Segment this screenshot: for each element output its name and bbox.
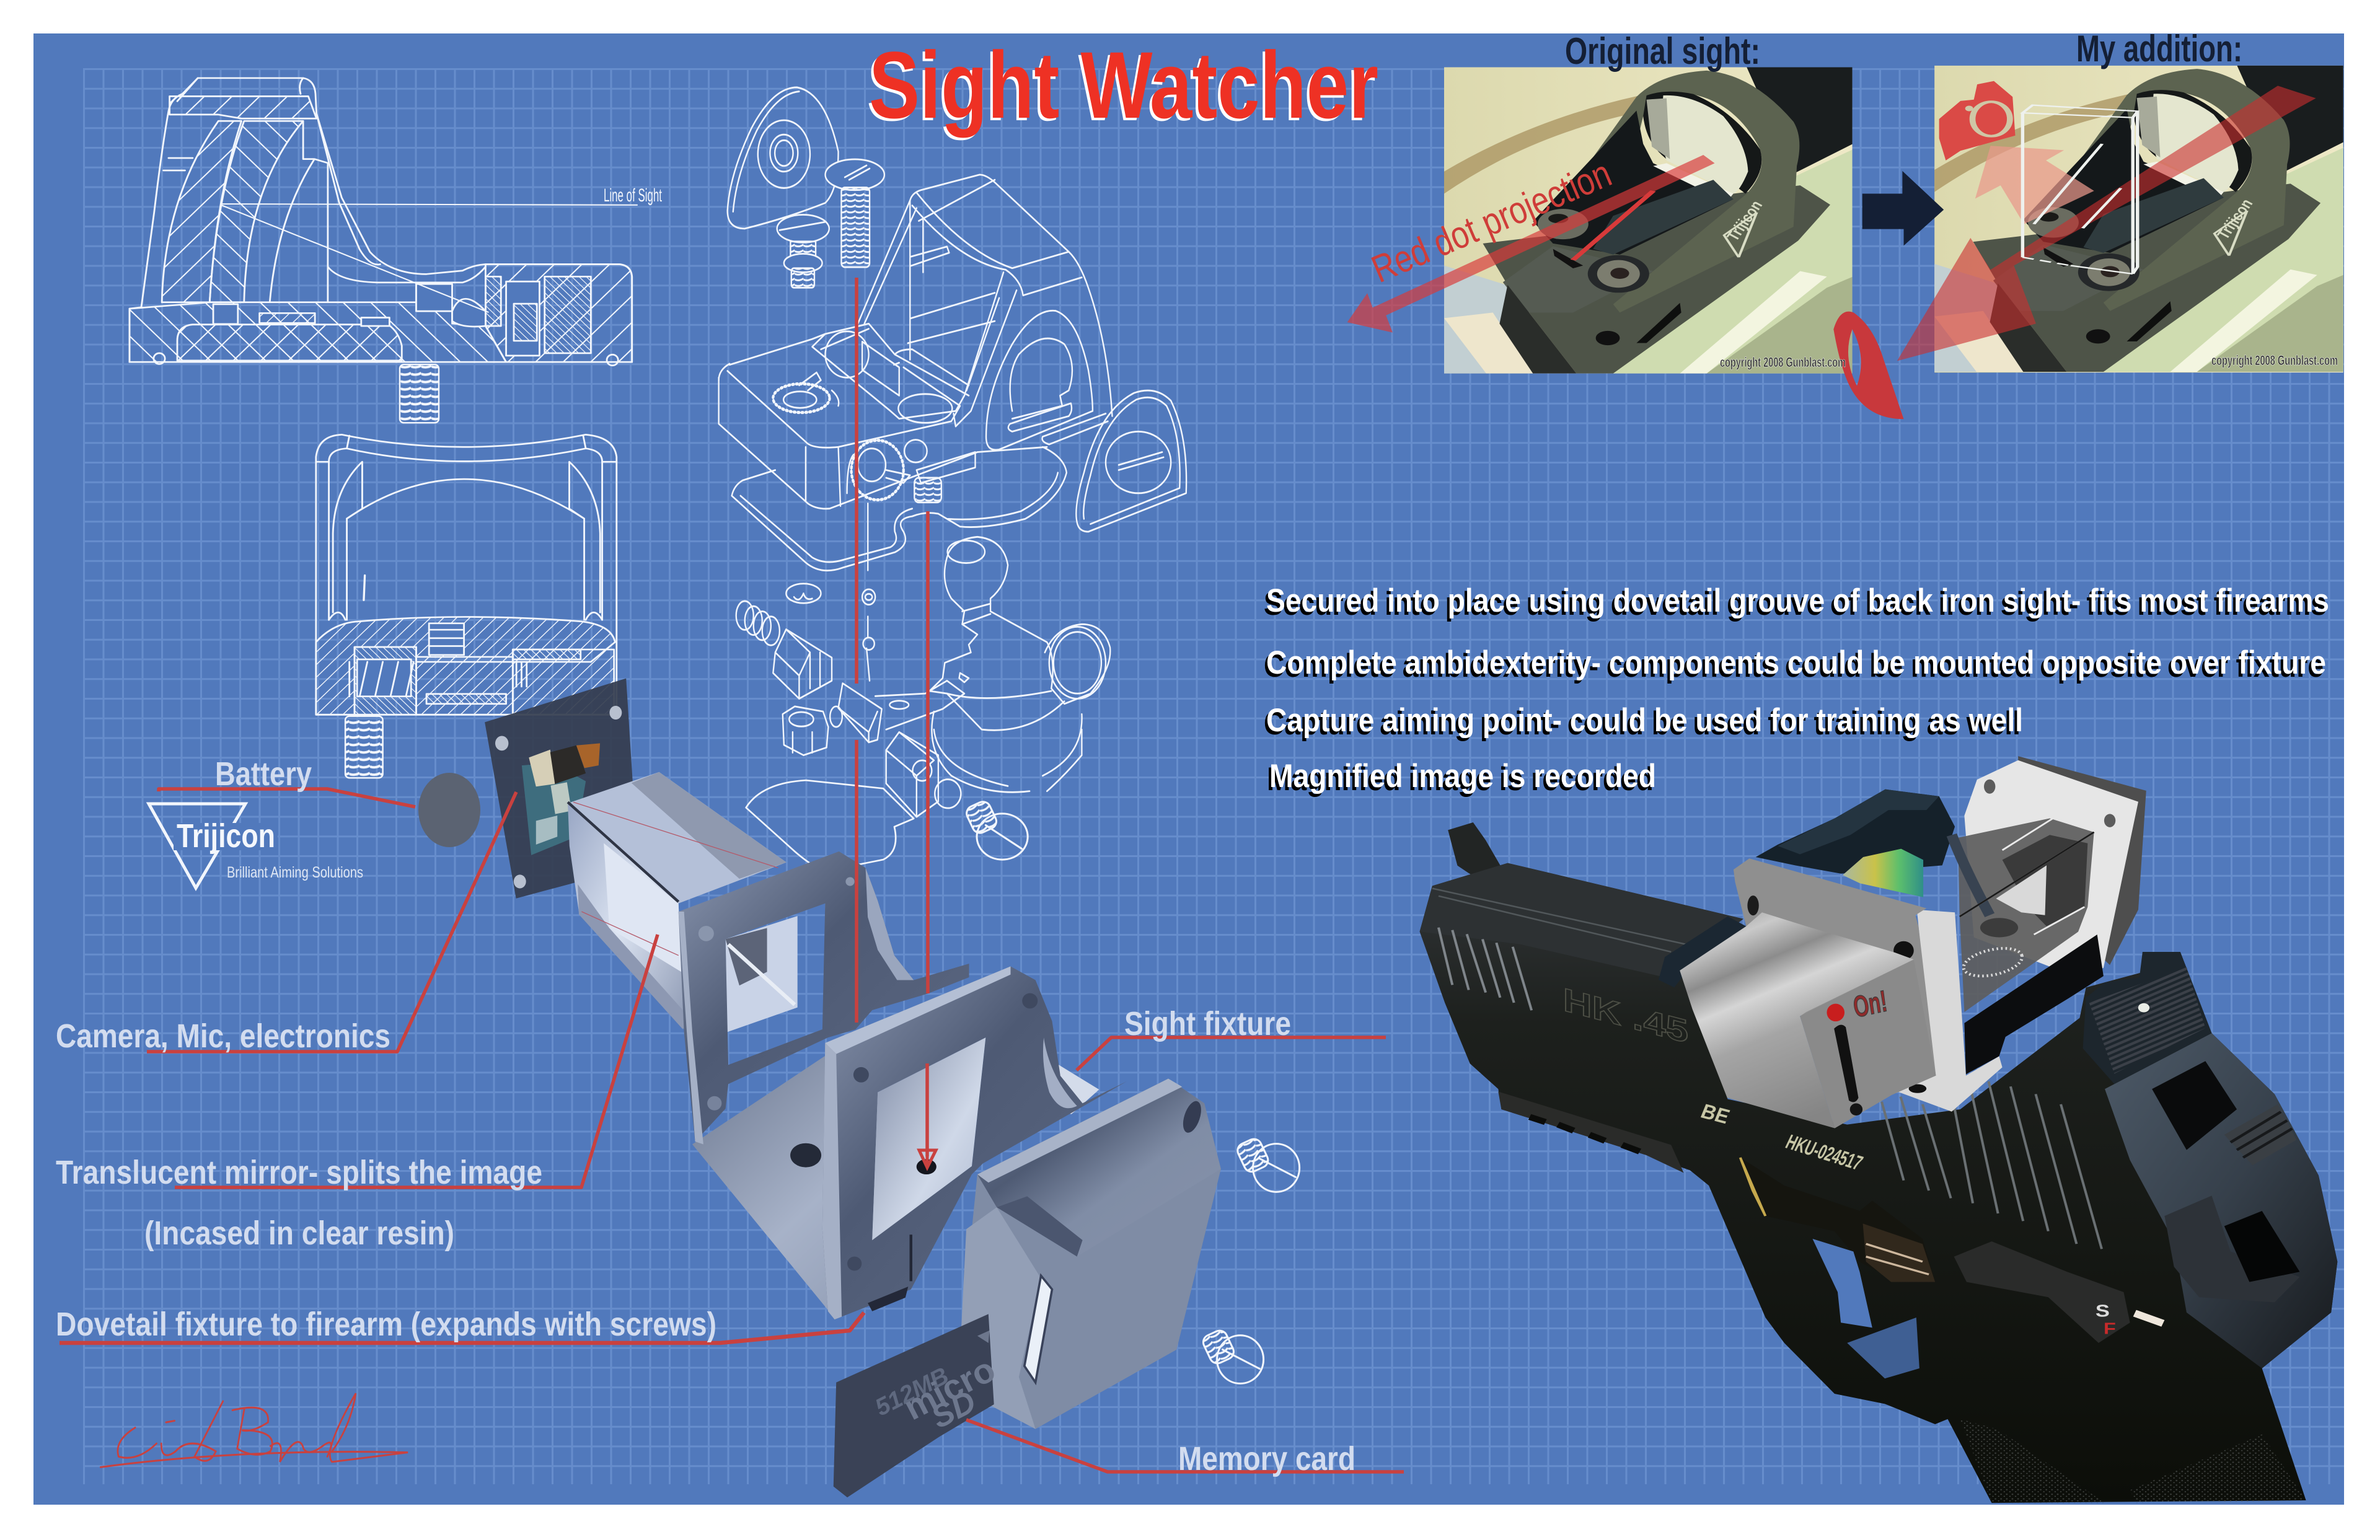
Trijicon logo: Trijicon bbox=[177, 817, 275, 855]
lower block with screw bbox=[886, 732, 961, 817]
slide release lever bbox=[1740, 1158, 1935, 1282]
signature bbox=[100, 1393, 408, 1467]
Trijicon logo: Brilliant Aiming Solutions bbox=[227, 864, 363, 881]
mounting screw thread bbox=[400, 364, 439, 423]
micro SD memory card: 512MB bbox=[871, 1363, 953, 1421]
trigger bbox=[1863, 1223, 1935, 1282]
silver cap front flange bbox=[1734, 858, 1936, 1128]
side cross-section line drawing with line of sight bbox=[130, 78, 637, 423]
feature: aiming point: Capture aiming point- could be used for training as well bbox=[1266, 702, 2023, 739]
label: sight fixture: Sight fixture bbox=[1124, 1005, 1291, 1042]
icon: red eccentric cap bbox=[1833, 312, 1904, 419]
pivot knob and spring plate bbox=[930, 537, 1110, 792]
label: dovetail fixture: Dovetail fixture to firearm (expands with screws) bbox=[56, 1306, 716, 1343]
label: battery: Battery bbox=[215, 755, 312, 793]
pistol bbox=[1420, 822, 2337, 1503]
label: camera, mic, electronics: Camera, Mic, electronics bbox=[56, 1018, 390, 1055]
small pins bbox=[786, 503, 875, 680]
barrel shroud bbox=[1659, 917, 1747, 987]
safety marking S: S bbox=[2096, 1301, 2110, 1321]
photo credit left: copyright 2008 Gunblast.com bbox=[1720, 354, 1846, 370]
translucent mirror resin block bbox=[568, 772, 787, 1029]
card slot bbox=[1834, 1025, 1858, 1102]
rear serrations bbox=[1882, 1081, 2102, 1249]
large countersunk screw bbox=[825, 159, 884, 267]
battery disc bbox=[418, 773, 480, 847]
hammer bbox=[2152, 1061, 2237, 1150]
slide top ledge bbox=[1420, 863, 1743, 977]
red leader lines bbox=[60, 278, 1404, 1472]
white front plate bbox=[1892, 910, 2003, 1112]
memory slot cover bbox=[961, 1078, 1221, 1429]
lower rail bbox=[1498, 1091, 1684, 1173]
Trijicon logo bbox=[149, 804, 363, 888]
feature: magnified image: Magnified image is recorded bbox=[1269, 758, 1656, 794]
lower black mount bbox=[1964, 935, 2104, 1074]
lower gasket, screw drawings around assembly bbox=[746, 780, 1300, 1384]
loose screw upper bbox=[964, 799, 1028, 860]
arrow: reflected image to camera bbox=[1975, 146, 2094, 224]
HK logo marking: HK .45 bbox=[1563, 980, 1688, 1050]
clear prism bbox=[1958, 819, 2094, 1012]
sight fixture front plate bbox=[822, 966, 1127, 1319]
lower mounting screw thread bbox=[345, 716, 383, 778]
3D exploded assembly bbox=[568, 772, 1221, 1497]
photo: my addition bbox=[1934, 66, 2343, 372]
small screw and washer bbox=[777, 215, 829, 288]
sight hood bbox=[1756, 790, 1955, 874]
camera and electronics board bbox=[485, 679, 638, 899]
spring bbox=[736, 601, 780, 645]
arrow: original to addition bbox=[1862, 171, 1944, 245]
trigger guard opening bbox=[1812, 1239, 1872, 1327]
battery contact bracket bbox=[839, 680, 964, 742]
back bracket plate bbox=[679, 851, 969, 1142]
front cross-section line drawing bbox=[316, 434, 617, 778]
pistol body bbox=[1420, 863, 2337, 1503]
floor of sight fixture bbox=[1036, 1054, 1099, 1114]
slider block bbox=[773, 630, 832, 698]
safety marking F: F bbox=[2104, 1319, 2116, 1337]
rear sight bbox=[2083, 952, 2211, 1084]
right eccentric cap bbox=[1076, 390, 1186, 532]
status LED bbox=[1827, 1004, 1844, 1021]
silver cap body bbox=[1680, 912, 1914, 1128]
loose screw right bbox=[1235, 1137, 1300, 1192]
label: my addition: My addition: bbox=[2076, 28, 2242, 69]
micro SD memory card: micro bbox=[898, 1350, 1002, 1428]
gasket outline bbox=[732, 447, 1067, 571]
label: On!: On! bbox=[1849, 985, 1891, 1024]
grip stippling bbox=[1960, 1419, 2306, 1503]
base dials bbox=[773, 372, 976, 503]
photo: original sight bbox=[1444, 67, 1853, 374]
arrow: light path through addition bbox=[1897, 86, 2316, 361]
label: translucent mirror: Translucent mirror- splits the image bbox=[56, 1154, 542, 1191]
label: red dot projection: Red dot projection bbox=[1366, 152, 1618, 291]
label: memory card: Memory card bbox=[1178, 1440, 1355, 1477]
title: Sight Watcher bbox=[869, 32, 1378, 138]
sight hood and base bbox=[719, 175, 1112, 509]
label: line of sight: Line of Sight bbox=[604, 185, 662, 206]
marking BE: BE bbox=[1698, 1099, 1733, 1128]
photo comparison panel bbox=[1347, 66, 2343, 419]
marking serial: HKU-024517 bbox=[1783, 1130, 1866, 1174]
prism seen through window bbox=[726, 916, 798, 1032]
left eccentric cap bbox=[728, 87, 839, 229]
feature list bbox=[1266, 583, 2329, 794]
exploded isometric sight line drawing bbox=[719, 87, 1186, 817]
rear white plate bbox=[1964, 760, 2138, 979]
rear plate dark edge bbox=[2018, 756, 2146, 965]
front sight bbox=[1448, 822, 1508, 878]
component labels bbox=[56, 755, 1355, 1477]
mirror block outline bbox=[2022, 105, 2138, 274]
micro SD memory card bbox=[834, 1314, 1002, 1497]
rear slide block bbox=[2105, 1033, 2337, 1368]
micro SD memory card: SD bbox=[925, 1383, 982, 1435]
front serrations bbox=[1439, 928, 1532, 1010]
label: original sight: Original sight: bbox=[1565, 30, 1760, 72]
label: clear resin note: (Incased in clear resin) bbox=[144, 1215, 454, 1252]
floor of back bracket bbox=[692, 1054, 972, 1317]
loose screw lower bbox=[1201, 1328, 1264, 1384]
safety lever bbox=[1954, 1241, 2130, 1343]
hex nut bbox=[783, 706, 842, 755]
arrow: red dot projection bbox=[1347, 155, 1715, 333]
icon: camera bbox=[1939, 81, 2016, 161]
sight lens bbox=[1843, 849, 1923, 897]
fixture mounted on pistol bbox=[1680, 756, 2146, 1128]
